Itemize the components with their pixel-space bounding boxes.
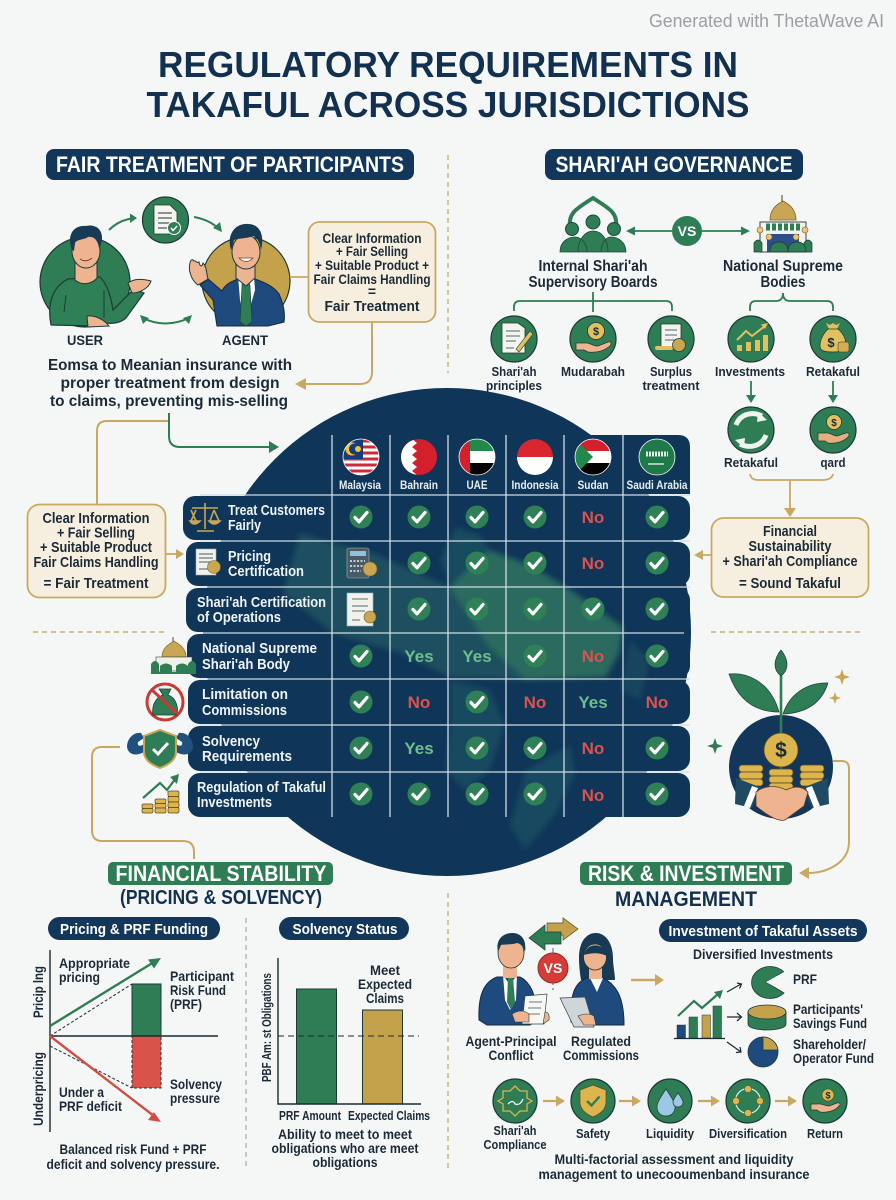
- icon: certificate: [347, 593, 376, 626]
- text: description: Eomsa to Meanian insurance with: [48, 357, 292, 374]
- title: TAKAFUL ACROSS JURISDICTIONS: [146, 84, 750, 125]
- chart: solvency status: PRF Amount: [279, 1108, 342, 1123]
- callout: fair treatment formula: + Suitable Product +: [315, 257, 429, 273]
- chart: pricing and prf: (PRF): [170, 996, 202, 1012]
- row: shariah certification: [197, 593, 668, 626]
- fund: prf: [752, 966, 817, 998]
- caption: multi-factorial: [538, 1151, 810, 1182]
- flag: malaysia: [343, 439, 379, 475]
- row: pricing certification: [196, 548, 668, 580]
- step: liquidity: [646, 1079, 695, 1141]
- callout: sound takaful: Sustainability: [748, 538, 832, 555]
- chart: pricing and prf: PRF deficit: [59, 1098, 122, 1114]
- column labels: Bahrain: [400, 480, 438, 492]
- world circle background: [203, 388, 691, 876]
- flag: indonesia: [517, 439, 553, 475]
- row: solvency requirements: Requirements: [202, 748, 292, 765]
- fund: participants savings: Savings Fund: [793, 1015, 867, 1031]
- chart: pricing and prf: Under a: [59, 1084, 104, 1100]
- label: user: USER: [67, 332, 103, 348]
- chart: pricing and prf: Underpricing: [30, 1052, 46, 1126]
- column labels: UAE: [466, 480, 488, 492]
- column labels: Saudi Arabia: [626, 480, 688, 492]
- exchange arrows: [547, 918, 578, 940]
- heading: risk and investment: MANAGEMENT: [615, 888, 757, 911]
- row: pricing certification: Pricing: [228, 548, 271, 565]
- label: surplus treatment: [642, 364, 700, 393]
- chart: pricing and prf: Solvency: [170, 1076, 222, 1092]
- text: diversified investments: Diversified Investments: [693, 946, 833, 962]
- chart icon: growth: [674, 990, 725, 1038]
- column labels: Malaysia: [339, 480, 382, 492]
- icon: mudarabah: $: [593, 326, 599, 338]
- step: liquidity: Liquidity: [646, 1126, 695, 1141]
- row: national supreme shariah body: National Supreme: [202, 640, 317, 657]
- step: safety: Safety: [576, 1126, 611, 1141]
- icon: national body: [754, 195, 812, 252]
- icon: agent vs regulated: [479, 918, 624, 1027]
- vs badge: [552, 948, 554, 990]
- man: [479, 933, 549, 1025]
- row: solvency requirements: No: [582, 739, 604, 758]
- row: limitation on commissions: Limitation on: [202, 686, 288, 703]
- labels: conflict and commissions: Regulated: [571, 1033, 631, 1049]
- row: national supreme shariah body: Yes: [404, 647, 434, 666]
- tree connectors: [514, 292, 833, 312]
- step: return: Return: [807, 1126, 843, 1141]
- row: national supreme shariah body: No: [582, 647, 604, 666]
- icon: mosque: [151, 637, 196, 674]
- column labels: [339, 480, 688, 492]
- icon: mudarabah: [570, 316, 616, 362]
- step: shariah compliance: [484, 1079, 546, 1152]
- heading: financial stability: [108, 861, 333, 909]
- label: investments: Investments: [715, 364, 785, 379]
- row: treat customers fairly: Treat Customers: [228, 502, 325, 519]
- arrow: callout to pricing row: [166, 549, 184, 559]
- row: regulation of takaful investments: [142, 774, 668, 813]
- row: national supreme shariah body: Yes: [462, 647, 492, 666]
- heading: risk and investment: RISK & INVESTMENT: [588, 861, 784, 886]
- flag: saudi arabia: [639, 439, 675, 475]
- heading: risk and investment: [580, 861, 792, 911]
- connector: agent to callout: [290, 276, 308, 278]
- callout: fair treatment formula: Fair Treatment: [324, 298, 420, 315]
- fund: shareholder: Operator Fund: [793, 1050, 874, 1066]
- caption: pricing: deficit and solvency pressure.: [46, 1156, 220, 1172]
- callout: sound takaful: + Shari'ah Compliance: [722, 553, 858, 570]
- step: diversification: Diversification: [709, 1126, 787, 1141]
- fund: shareholder: [748, 1036, 874, 1067]
- arrow: callout to table: [694, 550, 711, 560]
- callout: left fair treatment: [28, 504, 166, 598]
- title: [146, 44, 750, 125]
- flag: bahrain: [401, 439, 437, 475]
- caption: solvency: obligations who are meet: [272, 1140, 419, 1156]
- row: solvency requirements: [127, 730, 668, 768]
- label: retakaful: Retakaful: [806, 364, 860, 379]
- icon: retakaful cycle: [728, 407, 774, 453]
- arrow: to risk heading: [799, 761, 849, 879]
- row: pricing certification: No: [582, 554, 604, 573]
- icon: retakaful bag: $: [827, 335, 835, 350]
- chart: pricing and prf: Participant: [170, 968, 234, 984]
- text: description: proper treatment from design: [60, 375, 280, 392]
- callout: left fair treatment: + Fair Selling: [57, 524, 135, 542]
- column labels: Indonesia: [512, 480, 559, 492]
- labels: conflict and commissions: Commissions: [563, 1047, 639, 1063]
- pill: solvency status: [279, 917, 409, 940]
- callout: fair treatment formula: Clear Information: [322, 230, 422, 246]
- flag: uae: [459, 439, 495, 475]
- icon: user: [40, 226, 151, 327]
- chart: pricing and prf: pricing: [59, 969, 100, 985]
- row: limitation on commissions: No: [646, 693, 668, 712]
- icon: qard: [810, 407, 856, 453]
- icon: coins and growth: [142, 774, 179, 813]
- connector: solvency to financial stability: [92, 747, 194, 859]
- icon: investments: [728, 316, 774, 362]
- callout: sound takaful: = Sound Takaful: [739, 575, 841, 592]
- chart: pricing and prf: Appropriate: [59, 955, 130, 971]
- label: mudarabah: Mudarabah: [561, 364, 625, 379]
- caption: pricing: Balanced risk Fund + PRF: [60, 1141, 207, 1157]
- label: surplus treatment: Surplus: [650, 364, 692, 379]
- label: national bodies: National Supreme: [723, 258, 843, 275]
- fund: prf: PRF: [793, 971, 817, 987]
- label: shariah principles: Shari'ah: [492, 364, 537, 379]
- row: limitation on commissions: Commissions: [202, 702, 287, 719]
- callout: fair treatment formula: =: [368, 283, 376, 299]
- heading: fair treatment: FAIR TREATMENT OF PARTICIPANTS: [56, 152, 404, 177]
- step: return: [803, 1079, 847, 1141]
- icon: qard: $: [831, 418, 837, 429]
- label: national bodies: Bodies: [760, 274, 806, 291]
- chart: solvency status: PBF Am: st Obligations: [259, 973, 274, 1082]
- fund: participants savings: Participants': [793, 1001, 863, 1017]
- chart: solvency status: Claims: [366, 990, 404, 1006]
- grid lines: [200, 435, 690, 817]
- column labels: Sudan: [578, 480, 608, 492]
- caption: solvency: Ability to meet to meet: [278, 1126, 412, 1142]
- label: internal boards: Supervisory Boards: [528, 274, 658, 291]
- connector: vs: [626, 216, 750, 246]
- arrow: callout to text: [295, 322, 372, 390]
- connector: left gold to box: [97, 421, 169, 504]
- pill: investment of takaful assets: [659, 919, 867, 942]
- step: return: $: [825, 1090, 831, 1100]
- connector: vs: VS: [678, 223, 696, 239]
- panel: shariah governance: [486, 195, 860, 517]
- caption: pricing: [46, 1141, 220, 1172]
- arrow: to investments: [631, 974, 664, 986]
- row: treat customers fairly: Fairly: [228, 517, 262, 534]
- labels: conflict and commissions: [466, 1033, 639, 1063]
- label: retakaful 2: Retakaful: [724, 455, 778, 470]
- chart: pricing and prf: pressure: [170, 1090, 220, 1106]
- heading: financial stability: (PRICING & SOLVENCY): [120, 887, 322, 909]
- row: national supreme shariah body: [151, 637, 668, 674]
- arrows: process: [543, 1096, 797, 1106]
- callout: sound takaful: Financial: [763, 523, 817, 540]
- label: shariah principles: [486, 364, 542, 393]
- row: shariah certification: Shari'ah Certification: [197, 594, 326, 611]
- row: regulation of takaful investments: Regulation of Takaful: [197, 779, 326, 796]
- woman: [560, 933, 624, 1027]
- step: shariah compliance: Compliance: [484, 1137, 546, 1152]
- icon: agent: [189, 224, 290, 326]
- flag: sudan: [575, 439, 611, 475]
- chart: pricing and prf: [30, 950, 234, 1172]
- label: shariah principles: principles: [486, 378, 542, 393]
- icon: plant, coins and handshake: $: [775, 739, 787, 762]
- row: limitation on commissions: No: [408, 693, 430, 712]
- chart: pricing and prf: Pricip lng: [30, 966, 46, 1018]
- icon: document: [142, 197, 188, 243]
- arrows: down: [746, 381, 838, 403]
- pill: investment of takaful assets: Investment of Takaful Assets: [668, 923, 858, 940]
- connector: sound takaful: [750, 474, 833, 517]
- icon: pricing document: [196, 549, 220, 575]
- arrows: exchange: [109, 214, 222, 324]
- row: regulation of takaful investments: Investments: [197, 794, 272, 811]
- icon: sparkles: [707, 669, 850, 754]
- label: qard: qard: [820, 455, 846, 470]
- chart: solvency status: Expected: [358, 976, 412, 992]
- caption: solvency: [272, 1126, 419, 1170]
- icon: shield with arms: [127, 730, 193, 768]
- pill: solvency status: Solvency Status: [292, 921, 398, 938]
- label: national bodies: [723, 258, 843, 291]
- labels: conflict and commissions: Conflict: [488, 1047, 534, 1063]
- icon: surplus treatment: [648, 316, 694, 362]
- label: agent: AGENT: [222, 332, 268, 348]
- text: description: to claims, preventing mis-selling: [50, 393, 288, 410]
- fund: participants savings: [748, 1001, 867, 1031]
- callout: left fair treatment: + Suitable Product: [40, 539, 152, 556]
- icon: calculator seal: [347, 548, 377, 578]
- pill: pricing and prf funding: [48, 917, 220, 940]
- row: pricing certification: Certification: [228, 563, 304, 580]
- chart: pricing and prf: Risk Fund: [170, 982, 226, 998]
- arrow: green to table: [169, 413, 279, 453]
- row: limitation on commissions: No: [524, 693, 546, 712]
- label: internal boards: Internal Shari'ah: [538, 258, 648, 275]
- icon: plant, coins and handshake: [729, 650, 833, 820]
- text: description: [48, 357, 292, 410]
- row: solvency requirements: Yes: [404, 739, 434, 758]
- callout: fair treatment formula: Fair Claims Handling: [314, 271, 430, 287]
- chart: solvency status: Meet: [370, 962, 400, 978]
- icon: no commission: [147, 684, 183, 720]
- heading: financial stability: FINANCIAL STABILITY: [116, 861, 327, 886]
- pill: pricing and prf funding: Pricing & PRF Funding: [60, 921, 208, 938]
- callout: left fair treatment: Fair Claims Handling: [34, 554, 158, 571]
- map: world regions: [283, 527, 650, 850]
- caption: multi-factorial: management to unecooumenband insurance: [538, 1166, 810, 1182]
- icon: internal boards: [560, 198, 626, 252]
- callout: fair treatment formula: [308, 222, 436, 322]
- fund: shareholder: Shareholder/: [793, 1036, 866, 1052]
- icon: scales: [190, 503, 220, 531]
- center dashed dividers: [33, 155, 863, 1168]
- row: solvency requirements: Solvency: [202, 733, 261, 750]
- vertical divider: [245, 918, 247, 1168]
- callout: left fair treatment: = Fair Treatment: [44, 575, 149, 592]
- step: safety: [571, 1079, 615, 1141]
- title: REGULATORY REQUIREMENTS IN: [158, 44, 738, 85]
- row: treat customers fairly: [190, 502, 668, 534]
- row: limitation on commissions: [147, 684, 668, 720]
- labels: conflict and commissions: Agent-Principal: [466, 1033, 556, 1049]
- caption: multi-factorial: Multi-factorial assessment and liquidity: [554, 1151, 794, 1167]
- row: treat customers fairly: No: [582, 508, 604, 527]
- icon: retakaful bag: [810, 316, 856, 362]
- heading: shariah governance: SHARI'AH GOVERNANCE: [556, 152, 792, 177]
- icon: agent vs regulated: VS: [544, 960, 562, 976]
- step: shariah compliance: Shari'ah: [494, 1123, 537, 1138]
- label: internal boards: [528, 258, 658, 291]
- table rows background: [183, 435, 690, 817]
- arrows: fund split: [727, 983, 742, 1052]
- panel: fair treatment: [40, 197, 436, 410]
- row: regulation of takaful investments: No: [582, 786, 604, 805]
- icon: shariah principles: [491, 316, 537, 362]
- chart: solvency status: [259, 958, 430, 1170]
- callout: sound takaful: [712, 518, 868, 597]
- callout: fair treatment formula: + Fair Selling: [336, 243, 408, 259]
- label: surplus treatment: treatment: [642, 378, 700, 393]
- row: national supreme shariah body: Shari'ah Body: [202, 656, 291, 673]
- row: shariah certification: of Operations: [197, 609, 281, 626]
- chart: solvency status: Expected Claims: [348, 1108, 430, 1123]
- step: diversification: [709, 1079, 787, 1141]
- watermark: Generated with ThetaWave AI: [649, 11, 884, 31]
- caption: solvency: obligations: [312, 1154, 378, 1170]
- row: limitation on commissions: Yes: [578, 693, 608, 712]
- callout: left fair treatment: Clear Information: [42, 510, 150, 527]
